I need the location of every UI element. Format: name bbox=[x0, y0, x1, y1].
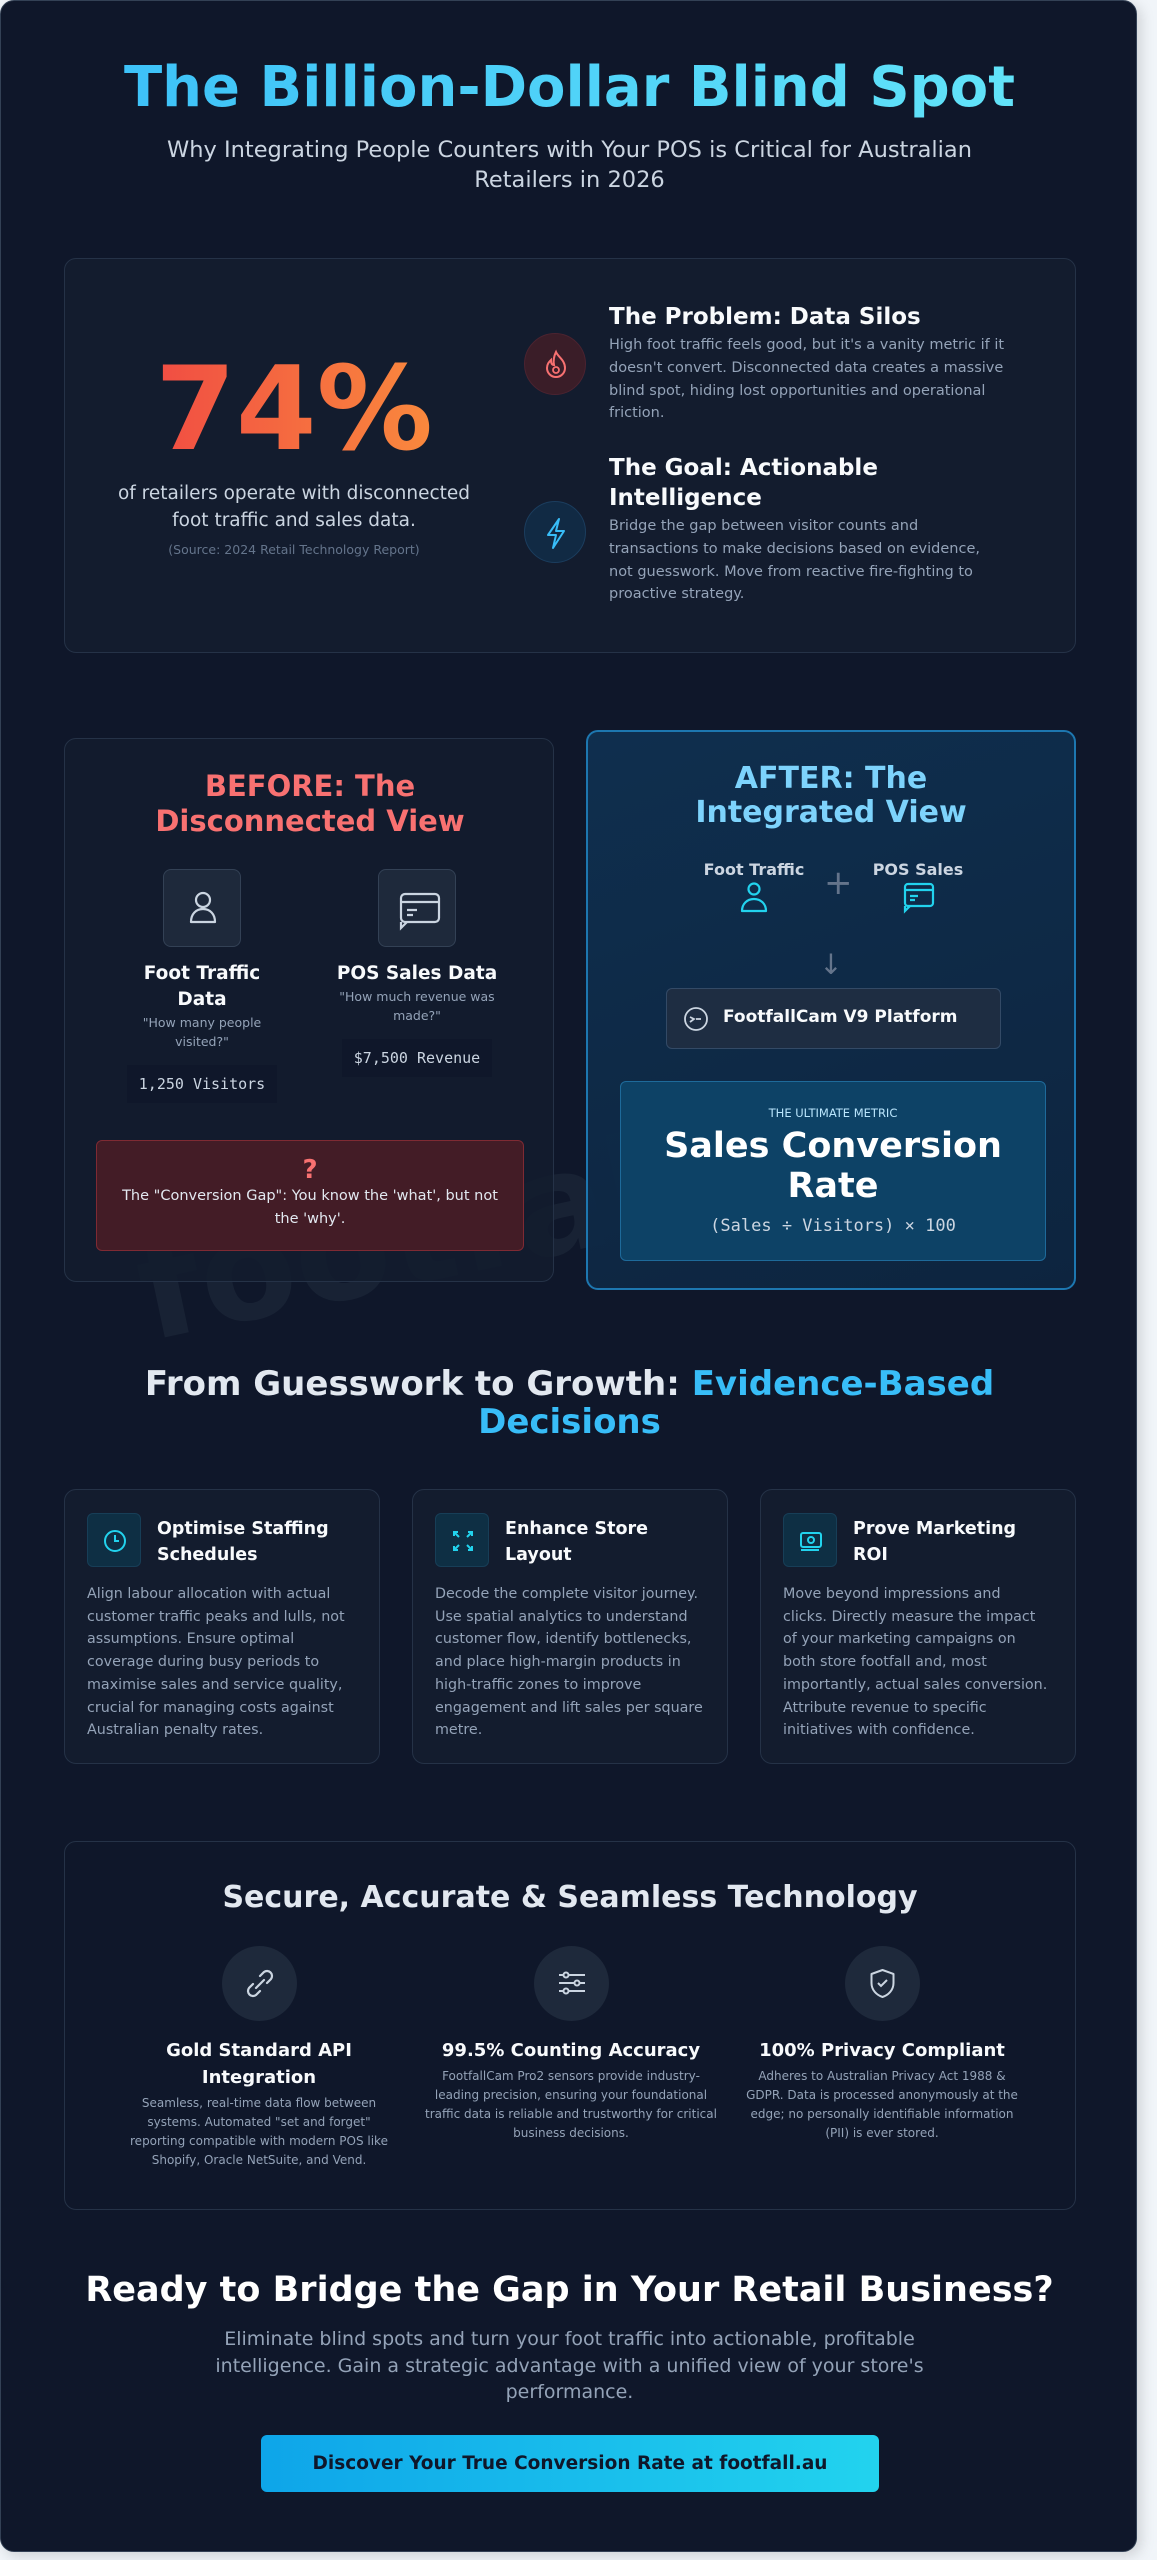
icon: card bbox=[378, 869, 456, 947]
watermark: footfall.au bbox=[124, 1044, 958, 1374]
tech item: privacy: 100% Privacy Compliant bbox=[759, 2040, 1005, 2061]
tech item: accuracy bbox=[425, 1946, 717, 2140]
icon: link bbox=[222, 1946, 296, 2021]
stat caption: of retailers operate with disconnected foot traffic and sales data. bbox=[118, 483, 470, 531]
card: staffing: Align labour allocation with actual customer traffic peaks and lulls, not assumptions. Ensure optimal coverage during busy periods to maximise sales and service quality, crucial for managing costs against Australian penalty rates. bbox=[87, 1586, 345, 1738]
pos sales data: "How much revenue was made?" bbox=[339, 989, 495, 1023]
revenue value: $7,500 Revenue bbox=[354, 1049, 480, 1067]
conversion gap callout: The "Conversion Gap": You know the 'what', but not the 'why'. bbox=[122, 1188, 498, 1227]
cta heading: Ready to Bridge the Gap in Your Retail Business? bbox=[85, 2270, 1054, 2310]
conversion gap callout: ? bbox=[302, 1155, 318, 1185]
foot traffic input bbox=[704, 860, 804, 912]
problem text: High foot traffic feels good, but it's a vanity metric if it doesn't convert. Disconnected data creates a massive blind spot, hiding lost opportunities and operational friction. bbox=[609, 337, 1004, 421]
pos sales data: POS Sales Data bbox=[337, 963, 497, 984]
plus sign: + bbox=[824, 863, 852, 903]
foot traffic data: "How many people visited?" bbox=[143, 1015, 261, 1049]
panel: after bbox=[586, 730, 1076, 1290]
revenue value bbox=[342, 1039, 492, 1077]
icon: lightning bbox=[524, 501, 586, 563]
foot traffic data bbox=[139, 869, 265, 1093]
tech item: api: Gold Standard API Integration bbox=[166, 2040, 352, 2088]
pos sales input bbox=[873, 860, 963, 914]
cta button: Discover Your True Conversion Rate at footfall.au bbox=[313, 2453, 827, 2474]
ultimate metric box bbox=[620, 1081, 1046, 1261]
tech heading: Secure, Accurate & Seamless Technology bbox=[222, 1880, 918, 1915]
ultimate metric box: Sales Conversion Rate bbox=[664, 1126, 1002, 1206]
foot traffic data: Foot Traffic Data bbox=[144, 963, 260, 1010]
card: marketing: Prove Marketing ROI bbox=[853, 1519, 1016, 1565]
card: staffing bbox=[64, 1489, 380, 1764]
pos sales data bbox=[337, 869, 497, 1067]
card: layout: Decode the complete visitor journey. Use spatial analytics to understand customer flow, identify bottlenecks, and place high-margin products in high-traffic zones to improve engagement and lift sales per square metre. bbox=[435, 1586, 703, 1738]
tech item: privacy: Adheres to Australian Privacy Act 1988 & GDPR. Data is processed anonymously at the edge; no personally identifiable information (PII) is ever stored. bbox=[746, 2069, 1018, 2140]
inputs bbox=[704, 860, 963, 914]
goal text: Bridge the gap between visitor counts and transactions to make decisions based on evidence, not guesswork. Move from reactive fire-fighting to proactive strategy. bbox=[609, 518, 980, 602]
section heading: guesswork to growth: From Guesswork to Growth: Evidence-Based Decisions bbox=[145, 1364, 994, 1442]
icon: expand bbox=[435, 1513, 489, 1567]
tech item: privacy bbox=[746, 1946, 1018, 2140]
cta text: Eliminate blind spots and turn your foot traffic into actionable, profitable intelligence. Gain a strategic advantage with a unified view of your store's performance. bbox=[215, 2328, 924, 2403]
tech item: accuracy: 99.5% Counting Accuracy bbox=[442, 2040, 700, 2061]
visitors value bbox=[127, 1065, 277, 1103]
title: The Billion-Dollar Blind Spot bbox=[124, 55, 1015, 120]
card: marketing bbox=[760, 1489, 1076, 1764]
goal text: The Goal: Actionable Intelligence bbox=[609, 455, 878, 511]
pos sales input: POS Sales bbox=[873, 860, 963, 879]
before heading: BEFORE: The Disconnected View bbox=[155, 769, 465, 838]
card: staffing: Optimise Staffing Schedules bbox=[157, 1519, 329, 1565]
platform box bbox=[666, 988, 1001, 1049]
icon: person bbox=[163, 869, 241, 947]
problem text: The Problem: Data Silos bbox=[609, 304, 921, 330]
icon: money bbox=[783, 1513, 837, 1567]
conversion gap callout bbox=[96, 1140, 524, 1251]
card: layout bbox=[412, 1489, 728, 1764]
tech item: api: Seamless, real-time data flow between systems. Automated "set and forget" reporting compatible with modern POS like Shopify, Oracle NetSuite, and Vend. bbox=[130, 2096, 388, 2167]
panel: before bbox=[64, 738, 554, 1282]
foot traffic input: Foot Traffic bbox=[704, 860, 804, 879]
panel: key stat bbox=[64, 258, 1076, 653]
tech item: api bbox=[130, 1946, 388, 2167]
visitors value: 1,250 Visitors bbox=[139, 1075, 265, 1093]
card: marketing: Move beyond impressions and clicks. Directly measure the impact of your marketing campaigns on both store footfall and, most importantly, actual sales conversion. Attribute revenue to specific initiatives with confidence. bbox=[783, 1586, 1047, 1738]
big stat 74%: 74% bbox=[155, 342, 433, 477]
source: (Source: 2024 Retail Technology Report) bbox=[168, 542, 420, 557]
subtitle: Why Integrating People Counters with Your POS is Critical for Australian Retailers in 2026 bbox=[167, 137, 972, 193]
card: layout: Enhance Store Layout bbox=[505, 1519, 648, 1565]
cta button bbox=[261, 2435, 879, 2492]
after heading: AFTER: The Integrated View bbox=[695, 761, 967, 830]
platform box: FootfallCam V9 Platform bbox=[723, 1007, 957, 1027]
icon: fire bbox=[524, 333, 586, 395]
goal text bbox=[609, 455, 980, 602]
arrow down: ↓ bbox=[819, 948, 843, 981]
ultimate metric box: THE ULTIMATE METRIC bbox=[769, 1106, 897, 1120]
panel: technology bbox=[64, 1841, 1076, 2210]
ultimate metric box: (Sales ÷ Visitors) × 100 bbox=[710, 1216, 956, 1236]
tech item: accuracy: FootfallCam Pro2 sensors provide industry-leading precision, ensuring your foundational traffic data is reliable and trustworthy for critical business decisions. bbox=[425, 2069, 717, 2140]
icon: clock bbox=[87, 1513, 141, 1567]
icon: shield bbox=[844, 1946, 920, 2021]
icon: sliders bbox=[534, 1946, 608, 2021]
